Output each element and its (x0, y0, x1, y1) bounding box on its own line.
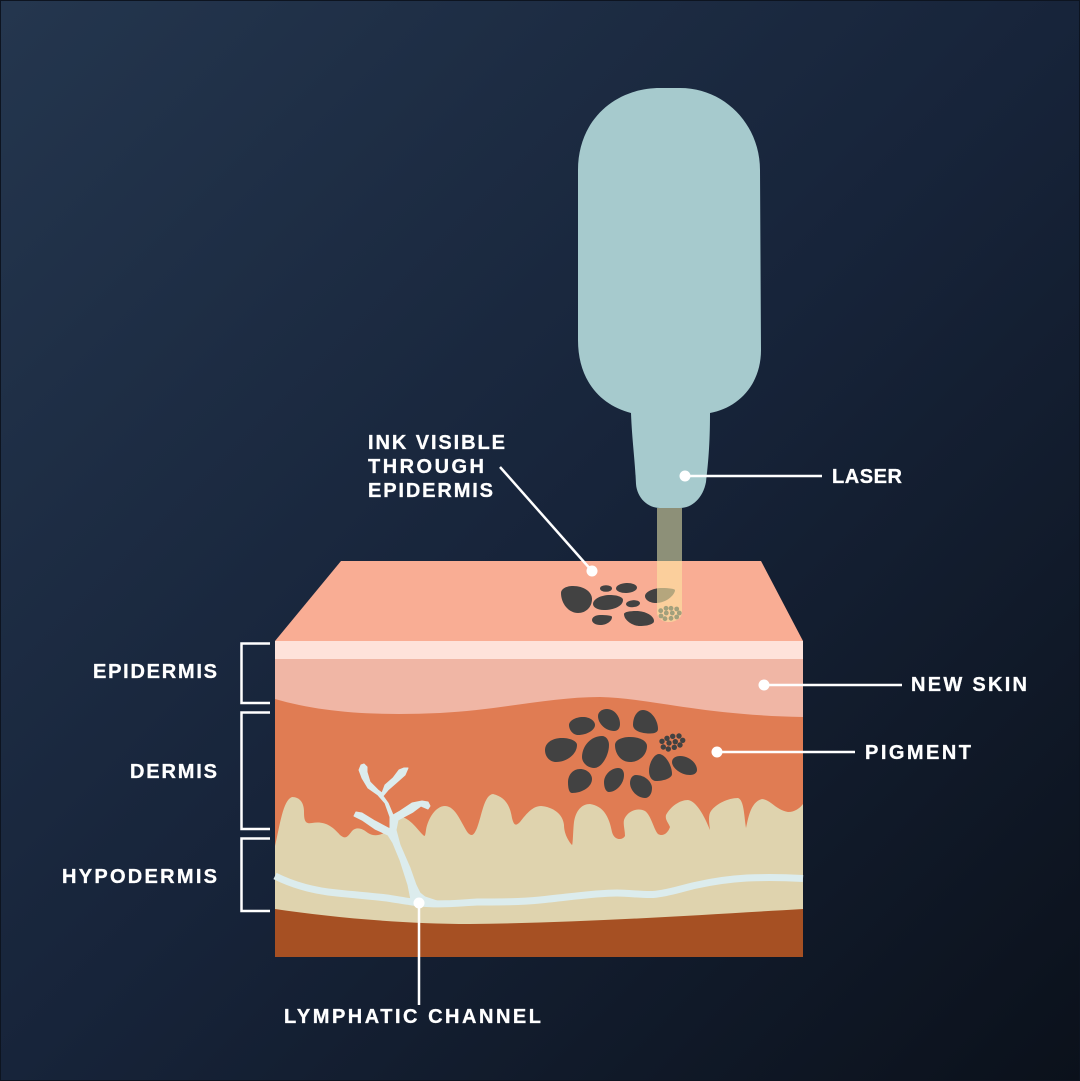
panel: skin cross-section (275, 561, 803, 957)
branching vessel (354, 764, 440, 902)
icon: laser handpiece (578, 88, 761, 508)
bracket label: dermis (130, 712, 270, 829)
callout: ink visible through epidermis: THROUGH (368, 456, 484, 478)
callout: laser (680, 466, 903, 488)
label text: INK VISIBLE (368, 432, 505, 454)
new skin layer (275, 659, 803, 721)
laser beam above skin (657, 508, 682, 561)
callout: laser: LASER (832, 466, 903, 488)
main channel (275, 876, 803, 904)
callout: lymphatic channel (284, 898, 541, 1028)
fragmented pigment cluster (659, 733, 685, 752)
bracket label: hypodermis (62, 838, 270, 911)
bracket label: epidermis: EPIDERMIS (93, 661, 217, 683)
shattered ink particles in beam (658, 606, 682, 621)
callout: new skin (758, 674, 1027, 696)
lymphatic channel (275, 764, 803, 904)
hypodermis layer (275, 794, 803, 957)
bracket label: hypodermis: HYPODERMIS (62, 866, 217, 888)
callout: lymphatic channel: LYMPHATIC CHANNEL (284, 1006, 541, 1028)
callout: ink visible through epidermis (368, 432, 598, 576)
bracket label: epidermis (93, 644, 270, 703)
leader line (500, 467, 592, 571)
callout: pigment (712, 742, 971, 764)
dermis layer (275, 697, 803, 860)
pigment in dermis (545, 709, 697, 798)
callout: new skin: NEW SKIN (911, 674, 1027, 696)
callout: pigment: PIGMENT (865, 742, 971, 764)
skin top surface (275, 561, 803, 641)
bracket label: dermis: DERMIS (130, 761, 217, 783)
outer epidermis strip (275, 641, 803, 659)
laser beam through skin (657, 561, 682, 622)
callout: ink visible through epidermis: EPIDERMIS (368, 480, 493, 502)
subcutaneous layer (275, 909, 803, 957)
ink particles visible through epidermis (561, 582, 675, 626)
